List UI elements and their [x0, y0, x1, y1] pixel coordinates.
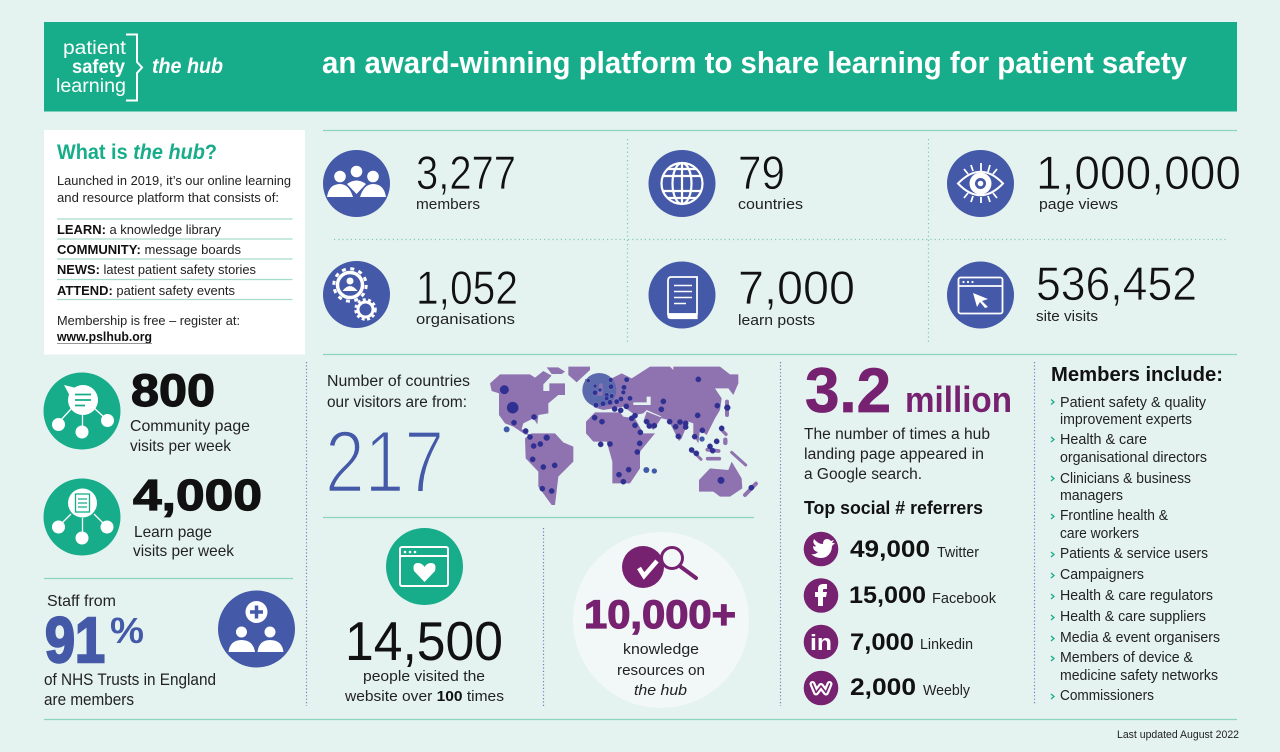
- list of member types: Campaigners: [1060, 567, 1144, 583]
- linkedin row: in: [810, 630, 832, 655]
- logo: patient safety learning: learning: [56, 76, 126, 97]
- list of hub features: ATTEND: patient safety events: [57, 283, 235, 298]
- stat: 1,000,000 page views: 1,000,000: [1036, 146, 1241, 199]
- stat: 79 countries: [648, 146, 803, 217]
- stat: 91% of NHS trusts: %: [110, 610, 144, 651]
- stat: 4,000 learn page visits: Learn page: [134, 524, 212, 541]
- logo: patient safety learning: [56, 34, 223, 100]
- list of member types: Health & care regulators: [1060, 588, 1213, 604]
- stat: 1,000,000 page views: page views: [1039, 196, 1118, 213]
- chart: world map of visitor countries: [490, 367, 756, 505]
- logo: patient safety learning: safety: [72, 57, 125, 78]
- intro text: and resource platform that consists of:: [57, 190, 279, 205]
- icon: browser with heart: [386, 528, 463, 605]
- stat: 79 countries: countries: [738, 196, 803, 213]
- stat: 91% of NHS trusts: of NHS Trusts in England: [44, 671, 216, 689]
- stat: 800 community page visits: visits per week: [130, 438, 232, 455]
- facebook row: Facebook: [932, 590, 996, 607]
- list of hub features: [57, 219, 292, 300]
- icon: globe: [648, 150, 716, 217]
- stat: 7,000 learn posts: learn posts: [738, 312, 815, 329]
- header banner: [44, 22, 1237, 112]
- list of member types: medicine safety networks: [1060, 668, 1218, 684]
- linkedin row: 7,000: [850, 629, 914, 656]
- weebly row: 2,000: [850, 674, 916, 701]
- stat: 10,000+ knowledge resources: [573, 532, 749, 708]
- stat: 10,000+ knowledge resources: resources on: [617, 662, 705, 679]
- list of member types: managers: [1060, 488, 1123, 504]
- stat: 14,500 people: people visited the: [363, 668, 485, 685]
- list of member types: Members of device &: [1060, 650, 1193, 666]
- countries count: Number of countries: [327, 373, 470, 390]
- stat: 91% of NHS trusts: 91: [45, 604, 105, 676]
- stat: 4,000 learn page visits: 4,000: [133, 471, 262, 520]
- icon: learn network: [44, 478, 120, 556]
- list of member types: organisational directors: [1060, 450, 1207, 466]
- twitter row: 49,000: [850, 536, 930, 563]
- stat: 91% of NHS trusts: are members: [44, 691, 134, 709]
- icon: eye: [947, 150, 1014, 217]
- linkedin row: [804, 625, 973, 659]
- heading: top social referrers: Top social # referrers: [804, 498, 983, 518]
- stat: 3,277 members: members: [416, 196, 480, 213]
- stat: 800 community page visits: 800: [131, 365, 215, 416]
- countries count: our visitors are from:: [327, 394, 467, 411]
- stat: 3.2 million google: The number of times a hub: [804, 426, 990, 443]
- stat: 10,000+ knowledge resources: knowledge: [623, 641, 699, 658]
- membership text: www.pslhub.org: [56, 329, 152, 344]
- twitter row: [804, 532, 979, 566]
- weebly row: Weebly: [923, 682, 970, 699]
- stat: 3.2 million google: landing page appeared in: [804, 446, 984, 463]
- stat: 4,000 learn page visits: [44, 471, 262, 560]
- facebook row: 15,000: [849, 582, 926, 609]
- list of member types: Patients & service users: [1060, 546, 1208, 562]
- footer: last updated: Last updated August 2022: [1117, 729, 1239, 741]
- list of member types: Clinicians & business: [1060, 471, 1191, 487]
- icon: people: [323, 150, 390, 217]
- stat: 14,500 people: 14,500: [345, 610, 503, 672]
- stat: 3.2 million google: 3.2: [805, 356, 891, 426]
- panel: members include: [1051, 364, 1223, 704]
- stat: 800 community page visits: Community page: [130, 418, 250, 435]
- list of member types: [1051, 395, 1220, 704]
- weebly row: [804, 671, 970, 705]
- stat: 79 countries: 79: [738, 146, 785, 199]
- stat: 14,500 people: [344, 528, 504, 705]
- countries count: 217: [325, 412, 444, 511]
- stat: 10,000+ knowledge resources: 10,000+: [584, 593, 736, 637]
- logo: patient safety learning: the hub: [152, 55, 223, 78]
- stat: 800 community page visits: [44, 365, 250, 455]
- list of hub features: COMMUNITY: message boards: [57, 242, 241, 257]
- list of hub features: NEWS: latest patient safety stories: [57, 262, 256, 277]
- icon: book: [648, 262, 716, 328]
- list of member types: Health & care suppliers: [1060, 609, 1206, 625]
- linkedin row: Linkedin: [920, 636, 973, 653]
- social referrers: [804, 498, 996, 705]
- list of member types: Health & care: [1060, 432, 1147, 448]
- stat: 536,452 site visits: site visits: [1036, 308, 1098, 325]
- heading: what is the hub: What is the hub?: [57, 141, 217, 164]
- panel: what is the hub: [44, 130, 305, 354]
- stat: 536,452 site visits: 536,452: [1036, 257, 1197, 310]
- membership text: Membership is free – register at:: [57, 313, 240, 328]
- stat: 3,277 members: [323, 146, 516, 217]
- membership text: [56, 313, 240, 344]
- stat: 1,052 organisations: [323, 261, 518, 328]
- list of member types: Media & event organisers: [1060, 630, 1220, 646]
- stat: 1,052 organisations: organisations: [416, 311, 515, 328]
- list of member types: improvement experts: [1060, 412, 1192, 428]
- list of member types: Patient safety & quality: [1060, 395, 1207, 411]
- header title: an award-winning platform to share learning for patient safety: [322, 45, 1188, 80]
- stat: 91% of NHS trusts: Staff from: [47, 593, 116, 610]
- facebook row: [804, 578, 996, 613]
- twitter row: Twitter: [937, 544, 979, 561]
- stat: 536,452 site visits: [947, 257, 1197, 328]
- stat: 91% of NHS trusts: [44, 590, 295, 709]
- icon: community network: [44, 372, 120, 450]
- icon: browser with cursor: [947, 262, 1014, 328]
- logo: patient safety learning: patient: [63, 38, 127, 59]
- stat: 3.2 million google: a Google search.: [804, 466, 922, 483]
- stat: 7,000 learn posts: [648, 261, 855, 329]
- list of hub features: LEARN: a knowledge library: [57, 222, 221, 237]
- stat: 10,000+ knowledge resources: the hub: [634, 682, 687, 699]
- stat: 14,500 people: website over 100 times: [344, 688, 504, 705]
- list of member types: Commissioners: [1060, 688, 1154, 704]
- stat: 3.2 million google: million: [905, 379, 1012, 420]
- stat: 3.2 million google: [804, 356, 1012, 483]
- stat: 4,000 learn page visits: visits per week: [133, 543, 235, 560]
- list of member types: Frontline health &: [1060, 508, 1168, 524]
- stat: 1,052 organisations: 1,052: [416, 261, 518, 314]
- list of member types: care workers: [1060, 526, 1139, 542]
- icon: staff with medical cross: [218, 590, 295, 668]
- stat: 3,277 members: 3,277: [416, 146, 516, 199]
- icon: check and magnifier: [622, 546, 696, 588]
- stat: 7,000 learn posts: 7,000: [738, 261, 855, 314]
- heading: members include: Members include:: [1051, 364, 1223, 386]
- intro text: Launched in 2019, it’s our online learning: [57, 173, 291, 188]
- stat: 1,000,000 page views: [947, 146, 1241, 217]
- icon: gears: [323, 261, 390, 328]
- intro text: [57, 173, 291, 205]
